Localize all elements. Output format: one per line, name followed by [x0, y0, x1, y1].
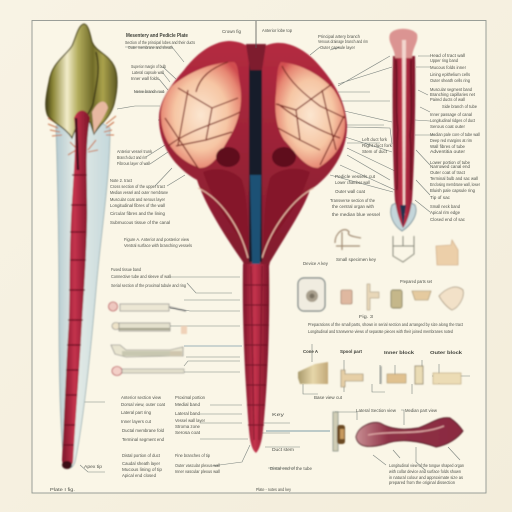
- text labels: top center and mid right: Stem of duct: [362, 149, 388, 154]
- T piece: [367, 284, 379, 310]
- text labels: top center and mid right: Crown fig: [222, 29, 242, 34]
- text labels: left column: Vessel wall layer: [175, 418, 205, 423]
- text labels: right column: Side branch of tube: [442, 104, 477, 109]
- text labels: right column: Deep red margins at rim: [430, 138, 472, 143]
- text labels: lower right captions: Preparations of the small parts, shown in serial section and arranged by size along the tract: [308, 322, 464, 327]
- text labels: top center and mid right: the central organ with: [332, 204, 375, 209]
- tray: [433, 373, 461, 384]
- text labels: left column: Fused tissue band: [111, 267, 141, 272]
- text labels: left column: Stroma zone: [175, 424, 201, 429]
- text labels: left column: Fibrous layer of wall: [117, 161, 150, 166]
- text labels: left column: Longitudinal fibres of the wall: [110, 203, 165, 208]
- text labels: left column: Inner vascular plexus wall: [175, 469, 220, 474]
- text labels: left column: Anterior section view: [121, 395, 162, 400]
- specimen: right slender organ: [389, 29, 417, 231]
- text labels: right column: Apical rim edge: [430, 210, 461, 215]
- text labels: right column: Outer sheath cells ring: [430, 78, 470, 83]
- text labels: lower right captions: Inner block: [384, 350, 415, 355]
- text labels: right column: Median pale core of tube wall: [430, 132, 480, 137]
- text labels: right column: Serous coat outer: [430, 124, 466, 129]
- lower dark chambers: [203, 169, 248, 250]
- tongue: [356, 418, 463, 447]
- tube top dark stripe: [76, 118, 78, 170]
- heart-shaped part: [439, 287, 463, 310]
- bottom tongue specimen: [333, 412, 463, 451]
- small jar: [341, 290, 352, 304]
- text labels: right column: Adventitia outer: [430, 149, 466, 154]
- specimen: central heart-shaped organ: [159, 41, 347, 453]
- text labels: right column: Enclosing membrane wall, lower: [430, 182, 480, 187]
- text labels: lower right captions: Cone A: [303, 349, 319, 354]
- text labels: right column: Lower portion of tube: [430, 160, 471, 165]
- text labels: lower right captions: with collar device and surface folds shown: [389, 469, 461, 474]
- text labels: right column: [430, 53, 480, 222]
- text labels: left column: Submucous tissue of the canal: [110, 220, 170, 225]
- text labels: left column: Medial band: [175, 402, 201, 407]
- text labels: lower right captions: Outer block: [430, 350, 463, 355]
- pale core stripe: [402, 40, 406, 215]
- olive capsule: [391, 290, 402, 308]
- red tube: [62, 110, 90, 468]
- central lower tube: [243, 264, 269, 453]
- rounded device: [298, 278, 325, 311]
- tube segments: [244, 285, 269, 425]
- text labels: left column: Serosa coat: [175, 430, 201, 435]
- left lobe: [161, 62, 241, 168]
- text labels: left column: Section of the principal lobes and their ducts: [125, 40, 196, 45]
- instrument 2: [112, 322, 187, 334]
- block: [387, 374, 406, 383]
- text labels: left column: Anterior vessel trunk: [117, 149, 153, 154]
- center divider line: [255, 21, 257, 48]
- collar device: [333, 412, 345, 451]
- cone: [298, 362, 328, 384]
- text labels: lower right captions: prepared from the original dissection: [389, 480, 456, 485]
- text labels: lower right captions: Lateral Section view: [356, 408, 397, 413]
- text labels: lower right captions: Duct stem: [272, 447, 294, 452]
- text labels: top center and mid right: [222, 28, 393, 217]
- text labels: lower right captions: in natural colour and approximate size as: [389, 475, 464, 480]
- text labels: right column: Upper ring band: [430, 58, 458, 63]
- text labels: right column: Outer coat of tract: [430, 170, 466, 175]
- text labels: right column: Bluish pale capsule ring: [430, 188, 476, 193]
- text labels: right column: Head of tract wall: [430, 53, 465, 58]
- text labels: right column: Muscular segment band: [430, 87, 472, 92]
- text labels: left column: Circular fibres and the lining: [110, 211, 166, 216]
- leader lines: [80, 47, 470, 472]
- bristles: [48, 116, 116, 155]
- text labels: left column: [84, 33, 220, 478]
- text labels: top center and mid right: Left duct fork: [362, 137, 388, 142]
- text labels: left column: Muscular coat and serous layer: [110, 197, 165, 202]
- text labels: left column: Dorsal view, outer coat: [121, 402, 166, 407]
- text labels: right column: Branching capillaries net: [430, 92, 476, 97]
- text labels: lower right captions: Median part view: [405, 408, 438, 413]
- instrument 4: [112, 366, 184, 376]
- text labels: left column: Outer vascular plexus wall: [175, 463, 220, 468]
- tan cup: [412, 291, 431, 300]
- text labels: lower right captions: Longitudinal and transverse views of separate pieces with their joined membranes noted: [308, 329, 453, 334]
- text labels: left column: Mucous lining of tip: [122, 467, 163, 472]
- text labels: lower right captions: Plate - notes and key: [256, 487, 292, 492]
- instruments: left mid row: [108, 302, 187, 376]
- text labels: right column: Inner passage of canal: [430, 112, 472, 117]
- text labels: left column: Lateral capsule wall: [132, 70, 164, 75]
- lobe veins: [165, 62, 240, 168]
- specimen: left olive bulb with sheath: [46, 24, 117, 469]
- text labels: left column: Serial section of the proximal tubule and ring: [111, 283, 186, 288]
- bottom bulb: [391, 199, 416, 231]
- text labels: left column: Distal portion of duct: [122, 453, 161, 458]
- text labels: top center and mid right: Transverse section of the: [330, 198, 376, 203]
- text labels: top center and mid right: Principal artery branch: [318, 34, 361, 39]
- tube segments: [63, 175, 87, 445]
- text labels: right column: Longitudinal ridges of duct: [430, 118, 476, 123]
- text labels: lower right captions: Small specimen key: [336, 257, 377, 262]
- instrument 1: [108, 302, 186, 311]
- text labels: lower right captions: Base view cut: [314, 395, 343, 400]
- upright: [415, 366, 423, 384]
- head: [389, 29, 417, 58]
- text labels: right column: Mucous folds inner: [430, 65, 467, 70]
- text labels: left column: Nerve branch root: [134, 89, 165, 94]
- heading upper left: Mesentery and Pedicle Plate: [126, 33, 188, 39]
- text labels: left column: Connective tube and sleeve of wall: [111, 274, 171, 279]
- text labels: left column: Cross section of the upper tract: [110, 184, 166, 189]
- spool: [341, 370, 363, 387]
- text labels: left column: Inner wall folds: [131, 76, 160, 81]
- text labels: left column: Note 2. tract: [110, 178, 133, 183]
- text labels: right column: Paired ducts of wall: [430, 97, 465, 102]
- text labels: lower right captions: Fig. 3: [359, 314, 374, 319]
- text labels: left column: Apex tip: [84, 464, 103, 469]
- text labels: lower right captions: Prepared parts set: [400, 279, 433, 284]
- text labels: left column: Outer membrane and sheath: [128, 45, 173, 50]
- text labels: right column: Small neck band: [430, 204, 461, 209]
- olive bulb: [46, 24, 117, 138]
- sheath: [56, 112, 110, 468]
- text labels: lower right captions: Distal end of the tube: [270, 466, 313, 471]
- text labels: lower right captions: Device A key: [303, 261, 329, 266]
- small anatomical parts: upper right: [298, 230, 463, 311]
- text labels: top center and mid right: Right duct fork: [362, 143, 393, 148]
- text labels: left column: Fine branches of tip: [175, 453, 211, 458]
- text labels: top center and mid right: Outer capsule layer: [320, 45, 355, 50]
- text labels: right column: Closed end of sac: [430, 217, 466, 222]
- text labels: top center and mid right: Pedicle vessels cut: [335, 174, 376, 179]
- text labels: left column: Lateral band: [175, 411, 201, 416]
- text labels: right column: Terminal bulb and sac wall: [430, 176, 478, 181]
- right lobe: [275, 62, 345, 168]
- text labels: lower right captions: Spool part: [340, 349, 363, 354]
- text labels: lower right captions: Plate I fig.: [50, 487, 75, 492]
- text labels: lower right captions: [50, 257, 464, 492]
- text labels: top center and mid right: Outer wall coat: [335, 189, 366, 194]
- text labels: left column: Figure A. Anterior and posterior view: [124, 237, 190, 242]
- text labels: left column: Proximal portion: [175, 395, 206, 400]
- text labels: lower right captions: Longitudinal view of the tongue shaped organ: [389, 463, 464, 468]
- instrument 3: [111, 345, 183, 357]
- text labels: left column: Caudal sheath layer: [122, 461, 161, 466]
- text labels: right column: Tip of sac: [430, 195, 451, 200]
- text labels: left column: Median vessel and outer membrane: [110, 190, 168, 195]
- text labels: top center and mid right: the median blue vessel: [332, 212, 380, 217]
- text labels: top center and mid right: Venous drainage branch and rim: [318, 39, 368, 44]
- central dark stripe: [249, 62, 262, 262]
- text labels: right column: Lining epithelium cells: [430, 72, 471, 77]
- text labels: left column: Ventral surface with branching vessels: [124, 243, 193, 248]
- text labels: top center and mid right: Anterior lobe top: [262, 28, 293, 33]
- text labels: left column: Branch duct and rim: [117, 155, 147, 160]
- bulb fold: [84, 52, 98, 122]
- text labels: left column: Lateral part ring: [121, 410, 152, 415]
- text labels: lower right captions: Key: [272, 412, 285, 417]
- sketch part 2: [393, 236, 414, 262]
- text labels: left column: Apical end closed: [122, 473, 157, 478]
- pale vessels: [198, 188, 314, 258]
- text labels: right column: Wall fibres of tube: [430, 144, 466, 149]
- text labels: left column: Inner layers cut: [121, 419, 152, 424]
- organ outline: [159, 41, 347, 270]
- body: [393, 56, 415, 228]
- text labels: right column: Narrowed canal end: [430, 164, 471, 169]
- small anatomical parts: lower row: [298, 362, 461, 387]
- text labels: left column: Ductal membrane fold: [122, 428, 165, 433]
- text labels: left column: Superior margin of bulb: [131, 64, 166, 69]
- tan block: [436, 240, 458, 265]
- sketch part 1: [335, 230, 361, 250]
- text labels: top center and mid right: Lower chamber wall: [335, 180, 370, 185]
- text labels: left column: Terminal segment end: [122, 437, 165, 442]
